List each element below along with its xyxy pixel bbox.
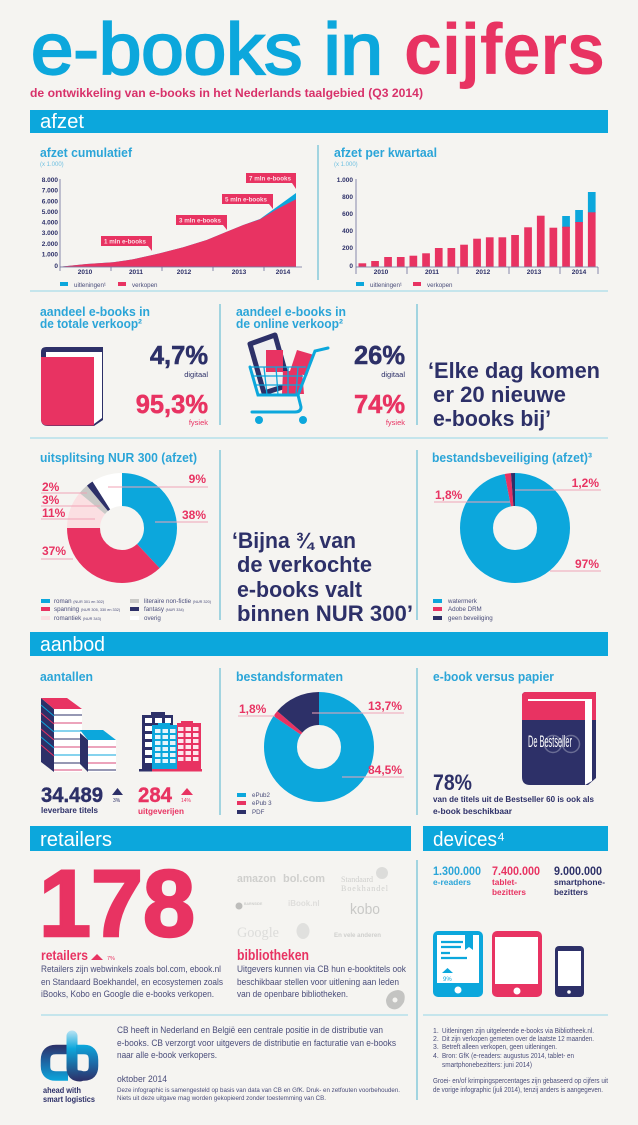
heading: afzet per kwartaal: afzet per kwartaal — [334, 145, 437, 160]
callout: 3 mln e-books — [176, 215, 227, 230]
stat: e-readers: 1.300.000 — [433, 866, 481, 878]
bar chart: quarterly sales: 2013 — [527, 269, 542, 276]
legend: NUR 300 — [41, 598, 212, 622]
stat: 34.489 leverbare titels: 3% — [113, 798, 121, 804]
legend: NUR 300: spanning (NUR 305, 330 en 332) — [54, 606, 121, 613]
tagline: ahead with — [43, 1085, 81, 1095]
data labels: NUR 300: 38% — [182, 508, 206, 522]
title — [31, 10, 605, 90]
stat: 284 uitgeverijen: 284 — [138, 784, 172, 807]
data labels: bestandsformaten: 13,7% — [368, 699, 402, 713]
icon: e-reader — [433, 931, 483, 997]
stat: 4,7% digitaal: digitaal — [184, 370, 208, 379]
area chart: cumulative sales: 1.000 — [42, 252, 58, 258]
callout: 3 mln e-books: 3 mln e-books — [179, 218, 221, 224]
legend: NUR 300: fantasy (NUR 334) — [144, 606, 185, 613]
area chart: cumulative sales: 3.000 — [42, 230, 58, 237]
icon: De Bestseller book: De Bestseller — [528, 732, 572, 751]
icon: De Bestseller book — [522, 692, 596, 785]
text block: retailers: Retailers zijn webwinkels zoals bol.com, ebook.nl — [41, 963, 221, 974]
callout: 7 mln e-books: 7 mln e-books — [249, 176, 291, 182]
title: e-books in — [31, 10, 383, 90]
stat: smartphone-bezitters: smartphone- — [554, 877, 605, 887]
footnotes: Uitleningen zijn uitgeleende e-books via Bibliotheek.nl. — [442, 1028, 594, 1035]
legend: bestandsformaten: ePub2 — [252, 792, 270, 799]
stat: 284 uitgeverijen: uitgeverijen — [138, 806, 184, 816]
quote: elke dag komen: er 20 nieuwe — [433, 382, 566, 407]
stat: tablet-bezitters — [492, 866, 540, 897]
panel: e-book versus papier — [433, 669, 596, 816]
footnotes: Bron: GfK (e-readers: augustus 2014, tablet- en — [442, 1053, 574, 1060]
quote: bijna drie kwart — [232, 528, 413, 626]
logos: retailers — [236, 867, 389, 941]
bar chart: quarterly sales: 800 — [342, 194, 353, 201]
bar chart: quarterly sales: 0 — [349, 263, 353, 270]
bar chart: quarterly sales: 400 — [342, 228, 353, 235]
stat: 4,7% digitaal: 4,7% — [150, 342, 208, 370]
legend: bestandsformaten: ePub 3 — [252, 800, 272, 807]
panel: aandeel totale verkoop — [40, 304, 208, 427]
data labels: bestandsbeveiliging: 1,8% — [435, 488, 463, 502]
section bar: afzet — [30, 110, 608, 133]
icon: e-reader: 9% — [443, 977, 452, 983]
area chart: cumulative sales: 4.000 — [42, 220, 58, 226]
bar chart: quarterly sales: 1.000 — [337, 177, 353, 184]
footnotes: 3. — [433, 1044, 439, 1051]
stat: 78%: 78% — [433, 770, 472, 795]
legend: NUR 300: literaire non-fictie (NUR 320) — [144, 598, 212, 605]
footnotes: Groei- en/of krimpingspercentages zijn gebaseerd op cijfers uit — [433, 1078, 608, 1085]
stat: tablet-bezitters: tablet- — [492, 877, 517, 887]
legend: afzet per kwartaal: verkopen — [427, 282, 453, 289]
text block: retailers: en Standaard Boekhandel, en ecosystemen zoals — [41, 976, 223, 987]
logo: CB — [46, 1036, 94, 1076]
legend: bestandsbeveiliging: watermerk — [447, 598, 478, 605]
footnotes: 4. — [433, 1053, 439, 1060]
heading: afzet cumulatief — [40, 145, 133, 168]
stat: 26% digitaal: 26% — [354, 342, 405, 370]
footnotes: 2. — [433, 1036, 439, 1043]
data labels: NUR 300: 2% — [42, 480, 60, 494]
text block: bibliotheken: bibliotheken — [237, 948, 309, 964]
data labels: NUR 300: 3% — [42, 493, 60, 507]
text block: about CB: oktober 2014 — [117, 1073, 167, 1084]
section bar: aanbod: aanbod — [40, 634, 105, 656]
title: cijfers — [404, 10, 605, 90]
legend: afzet per kwartaal: uitleningen¹ — [370, 282, 402, 289]
stat: 34.489 leverbare titels — [41, 784, 123, 815]
quote: bijna drie kwart: ‘Bijna ¾ van — [232, 528, 356, 553]
legend: afzet per kwartaal — [356, 282, 453, 289]
footnotes: de vorige infographic (juli 2014), tenzij anders is aangegeven. — [433, 1087, 603, 1094]
area chart: cumulative sales — [42, 177, 302, 276]
donut chart: bestandsformaten — [280, 708, 358, 786]
stat: 78%: e-book beschikbaar — [433, 806, 513, 816]
data labels: bestandsbeveiliging: 97% — [575, 557, 599, 571]
stat: 34.489 leverbare titels: 34.489 — [41, 784, 103, 807]
panel: uitsplitsing NUR 300 — [40, 450, 212, 622]
icon: office buildings — [139, 712, 202, 772]
text block: bibliotheken: Uitgevers kunnen via CB hun e-booktitels ook — [237, 963, 406, 974]
heading — [236, 304, 346, 331]
legend: NUR 300: overig — [144, 615, 161, 622]
footnotes: smartphonebezitters: juni 2014) — [442, 1062, 532, 1069]
data labels: bestandsbeveiliging: 1,2% — [572, 476, 599, 490]
footnotes — [433, 1028, 608, 1094]
legend: afzet cumulatief — [60, 282, 158, 289]
area chart: cumulative sales: 2012 — [177, 269, 192, 276]
heading: afzet per kwartaal: (x 1.000) — [334, 162, 358, 168]
subtitle: de ontwikkeling van e-books in het Nederlands taalgebied (Q3 2014) — [30, 86, 423, 100]
heading: bestandsbeveiliging (afzet)³ — [432, 450, 593, 465]
callout: 5 mln e-books: 5 mln e-books — [225, 196, 267, 204]
panel: retailers — [39, 851, 406, 1009]
tagline: smart logistics — [43, 1094, 95, 1104]
area chart: cumulative sales: 8.000 — [42, 177, 58, 184]
stat: 78%: van de titels uit de Bestseller 60 is ook als — [433, 794, 594, 804]
stat: e-readers: e-readers — [433, 877, 471, 887]
bar chart: quarterly sales: 2014 — [572, 269, 587, 276]
text block: retailers: iBooks, Kobo en Google die e-books verkopen. — [41, 988, 214, 999]
section bar: retailers: retailers — [40, 829, 112, 851]
text block: bibliotheken — [237, 948, 406, 999]
stat: smartphone-bezitters: bezitters — [554, 887, 588, 897]
footnotes: 1. — [433, 1028, 439, 1035]
icon: smartphone — [555, 946, 584, 997]
stat: tablet-bezitters: 7.400.000 — [492, 866, 540, 878]
stat: 78% — [433, 770, 594, 816]
icon: book — [41, 347, 103, 426]
heading: de totale verkoop² — [40, 316, 143, 331]
quote: elke dag komen: e-books bij’ — [433, 406, 551, 431]
icon: tablet — [492, 931, 542, 997]
area chart: cumulative sales: 6.000 — [42, 198, 58, 205]
legend: NUR 300: romantiek (NUR 343) — [54, 615, 102, 622]
donut chart: bestandsbeveiliging — [476, 490, 554, 566]
legend: bestandsbeveiliging — [433, 598, 493, 622]
logos: retailers: Google — [237, 925, 279, 941]
data labels: bestandsformaten: 84,5% — [368, 763, 402, 777]
panel: afzet cumulatief — [40, 145, 302, 289]
data labels: bestandsformaten: 1,8% — [239, 702, 267, 716]
text block: about CB: naar alle e-book verkopers. — [117, 1049, 217, 1060]
data labels: NUR 300: 37% — [42, 544, 66, 558]
bar chart: quarterly sales: 2010 — [374, 269, 389, 276]
area chart: cumulative sales: 2011 — [129, 269, 143, 276]
section bar: devices: devices⁴ — [433, 829, 505, 851]
legend: bestandsbeveiliging: Adobe DRM — [448, 606, 482, 613]
text block: about CB: Niets uit deze uitgave mag worden gekopieerd zonder toestemming van CB. — [117, 1095, 326, 1102]
callout: 5 mln e-books — [222, 194, 273, 209]
area chart: cumulative sales: 7.000 — [42, 188, 58, 195]
text block: retailers: 7% — [107, 956, 115, 962]
text block: about CB — [117, 1024, 400, 1102]
footnotes: Dit zijn verkopen gemeten over de laatste 12 maanden. — [442, 1036, 594, 1043]
logos: retailers: Boekhandel — [341, 884, 389, 893]
legend: NUR 300: roman (NUR 301 en 302) — [54, 598, 105, 605]
text block: about CB: e-books. CB verzorgt voor uitgevers de distributie en facturatie van e-books — [117, 1037, 396, 1048]
section bar: aanbod — [30, 632, 608, 656]
heading: aandeel e-books in — [40, 304, 150, 319]
panel: aandeel online verkoop — [236, 304, 405, 427]
text block: bibliotheken: beschikbaar stellen voor uitlening aan leden — [237, 976, 399, 987]
data labels: NUR 300: 9% — [189, 472, 206, 486]
heading: de online verkoop² — [236, 316, 344, 331]
panel: devices — [433, 866, 605, 997]
logos: retailers: BARNSIDE — [244, 902, 263, 906]
section bar: afzet: afzet — [40, 111, 84, 133]
callout: 1 mln e-books — [101, 236, 152, 251]
heading: afzet cumulatief: (x 1.000) — [40, 162, 64, 168]
heading: uitsplitsing NUR 300 (afzet) — [40, 450, 197, 465]
text block: bibliotheken: van de openbare bibliotheken. — [237, 988, 348, 999]
panel: aantallen — [40, 669, 202, 816]
area chart: cumulative sales: 2.000 — [42, 241, 58, 248]
section bar: devices — [423, 826, 608, 851]
area chart: cumulative sales: 2010 — [78, 269, 93, 276]
text block: retailers: retailers — [41, 947, 88, 963]
heading: afzet cumulatief: afzet cumulatief — [40, 145, 133, 160]
panel: afzet per kwartaal — [334, 145, 598, 289]
heading: aandeel e-books in — [236, 304, 346, 319]
logos: retailers: amazon — [237, 873, 276, 885]
callout: 7 mln e-books — [246, 173, 296, 189]
stat: 34.489 leverbare titels: leverbare titels — [41, 805, 98, 815]
donut chart: NUR 300 — [84, 490, 160, 566]
data labels: NUR 300: 11% — [42, 506, 66, 520]
bar chart: quarterly sales — [337, 177, 598, 276]
panel: bestandsformaten — [236, 669, 404, 816]
stat: 178: 178 — [39, 851, 195, 957]
stat: tablet-bezitters: bezitters — [492, 887, 526, 897]
icon: shopping cart — [250, 335, 328, 424]
stat: smartphone-bezitters: 9.000.000 — [554, 866, 602, 878]
panel: footer CB — [43, 1024, 400, 1104]
logos: retailers: iBook.nl — [288, 899, 320, 908]
text block: retailers — [41, 947, 223, 999]
legend: bestandsbeveiliging: geen beveiliging — [448, 615, 493, 622]
heading — [40, 304, 150, 331]
legend: bestandsformaten — [237, 792, 272, 816]
text block: about CB: CB heeft in Nederland en België een centrale positie in de distributie van — [117, 1024, 383, 1035]
panel: bestandsbeveiliging — [432, 450, 601, 622]
data labels: bestandsformaten — [238, 699, 404, 777]
bar chart: quarterly sales: 200 — [342, 245, 353, 252]
stat: 284 uitgeverijen — [138, 784, 193, 816]
bar chart: quarterly sales: 600 — [342, 211, 353, 218]
heading: aantallen — [40, 669, 93, 684]
legend: afzet cumulatief: uitleningen¹ — [74, 282, 106, 289]
heading: afzet per kwartaal — [334, 145, 437, 168]
bar chart: quarterly sales: 2011 — [425, 269, 439, 276]
heading: e-book versus papier — [433, 669, 554, 684]
quote: bijna drie kwart: de verkochte — [237, 552, 372, 577]
stat: 284 uitgeverijen: 14% — [181, 798, 192, 804]
stat: smartphone-bezitters — [554, 866, 605, 897]
quote: elke dag komen — [428, 358, 600, 431]
heading: bestandsformaten — [236, 669, 343, 684]
footnotes: Betreft alleen verkopen, geen uitleningen. — [442, 1044, 557, 1051]
stat: 95,3% fysiek: 95,3% — [136, 391, 208, 419]
quote: elke dag komen: ‘Elke dag komen — [428, 358, 600, 383]
quote: bijna drie kwart: e-books valt — [237, 577, 362, 602]
callout: 1 mln e-books: 1 mln e-books — [104, 238, 146, 246]
area chart: cumulative sales: 5.000 — [42, 209, 58, 216]
icon: library logo — [386, 990, 405, 1009]
stat: 26% digitaal: digitaal — [381, 370, 405, 379]
area chart: cumulative sales: 2014 — [276, 269, 291, 276]
bar chart: quarterly sales: 2012 — [476, 269, 491, 276]
stat: 74% fysiek: 74% — [354, 391, 405, 419]
text block: about CB: Deze infographic is samengesteld op basis van data van CB en GfK. Druk- en zetfouten voorbehouden. — [117, 1087, 400, 1094]
area chart: cumulative sales: 2013 — [232, 269, 247, 276]
section bar: retailers — [30, 826, 411, 851]
logos: retailers: En vele anderen — [334, 933, 381, 939]
logos: retailers: Standaard — [341, 875, 373, 884]
stat: 74% fysiek: fysiek — [386, 418, 405, 427]
stat: e-readers — [433, 866, 481, 887]
data labels: NUR 300 — [41, 472, 208, 559]
legend: bestandsformaten: PDF — [252, 809, 265, 816]
icon: stacks of books — [41, 698, 116, 772]
logos: retailers: bol.com — [283, 873, 325, 885]
stat: 95,3% fysiek: fysiek — [189, 418, 208, 427]
logos: retailers: kobo — [350, 901, 380, 918]
legend: afzet cumulatief: verkopen — [132, 282, 158, 289]
quote: bijna drie kwart: binnen NUR 300’ — [237, 601, 413, 626]
data labels: bestandsbeveiliging — [434, 476, 601, 571]
area chart: cumulative sales: 0 — [54, 263, 58, 270]
tagline — [43, 1085, 95, 1104]
